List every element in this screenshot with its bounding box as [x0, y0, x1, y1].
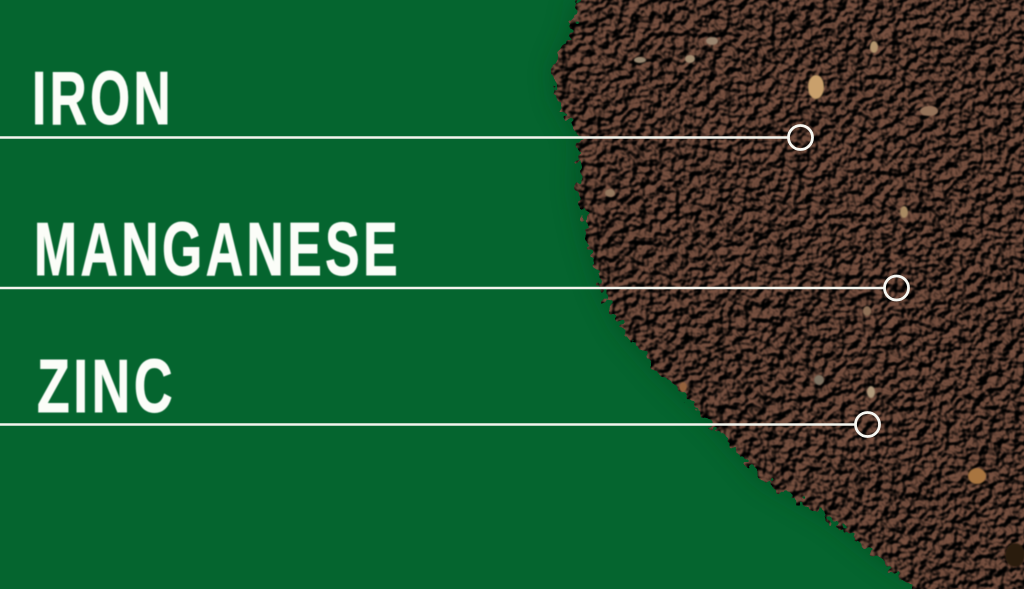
zinc name: ZINC	[37, 344, 176, 428]
iron marker	[788, 126, 812, 150]
iron leader line	[0, 136, 788, 139]
label: iron	[0, 56, 812, 150]
label: zinc	[0, 344, 880, 436]
zinc marker	[856, 412, 880, 436]
manganese leader line	[0, 287, 884, 289]
iron name: IRON	[32, 56, 174, 140]
soil granules	[552, 0, 1024, 589]
zinc leader line	[0, 423, 855, 426]
label: manganese	[0, 207, 908, 300]
manganese name: MANGANESE	[34, 207, 401, 291]
manganese marker	[884, 276, 908, 300]
soil shadow	[552, 0, 1024, 589]
light soil specks	[605, 37, 1024, 567]
